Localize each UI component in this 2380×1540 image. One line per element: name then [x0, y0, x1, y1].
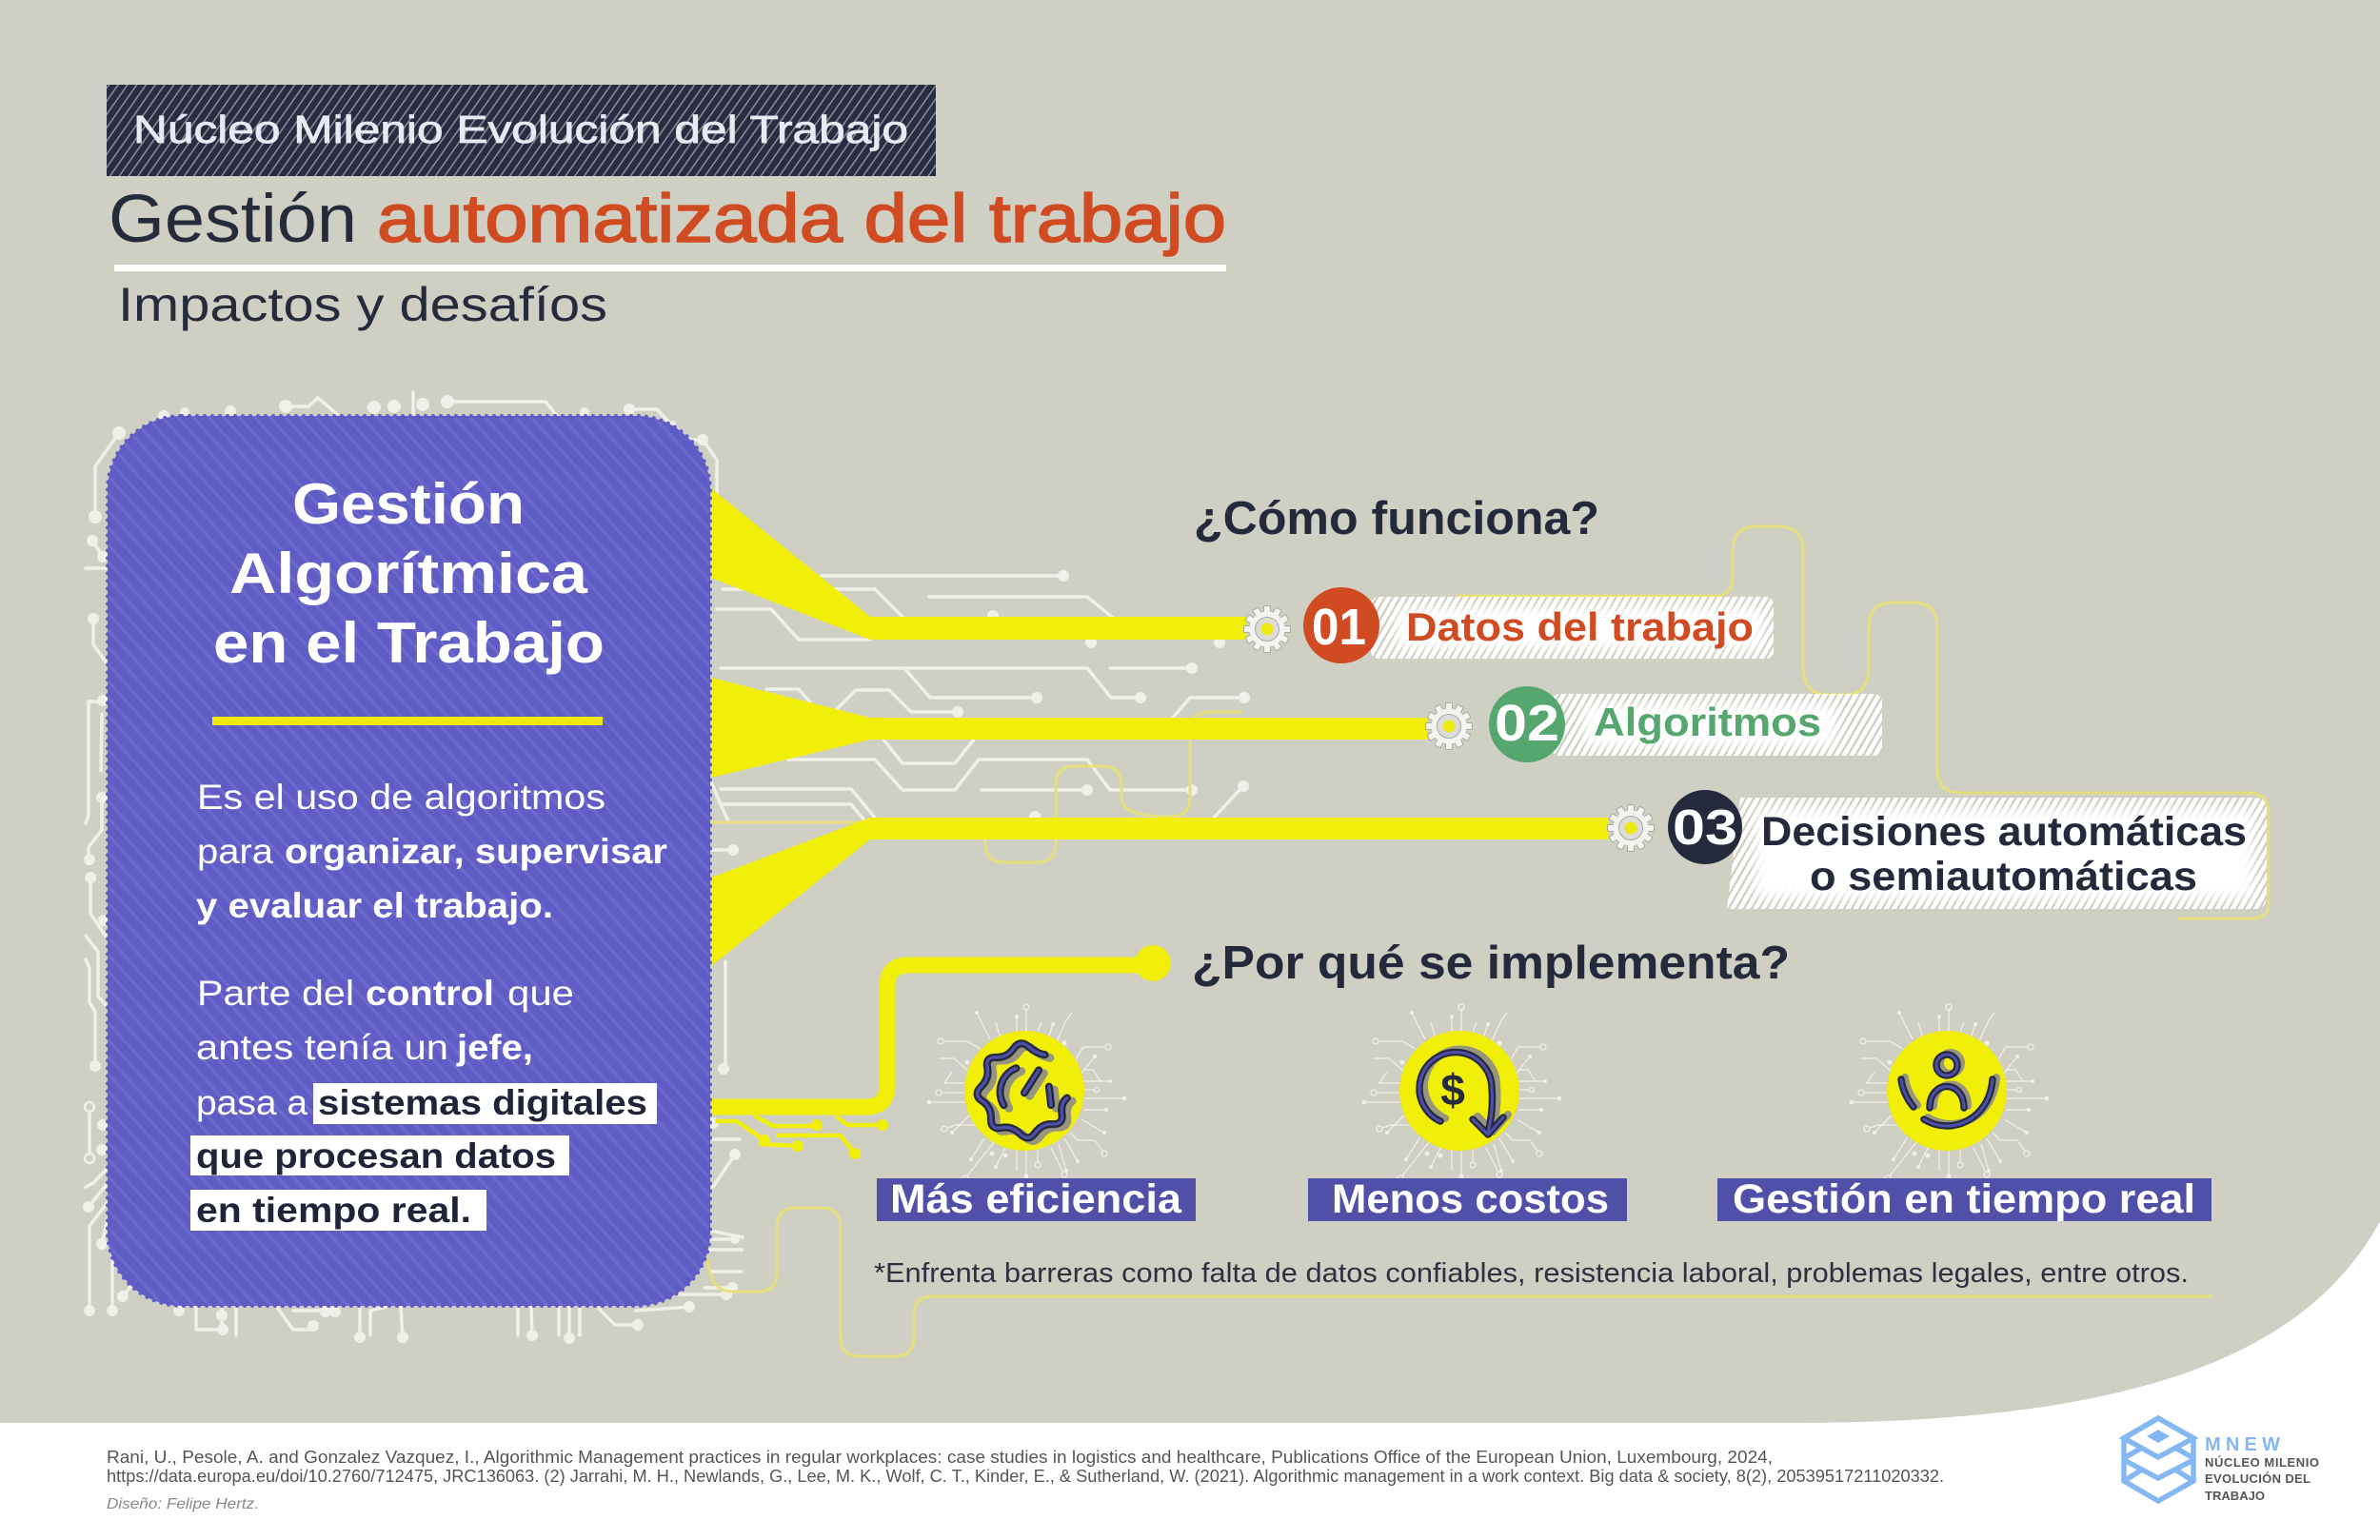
panel divider: [212, 717, 603, 725]
step 02 number: [1489, 686, 1565, 762]
panel definition text: antes tenía un: [196, 1028, 448, 1067]
connector 2: yellow taper to step 02: [711, 678, 1427, 778]
highlighted text: sistemas digitales: [318, 1083, 647, 1122]
panel definition text: y evaluar el trabajo.: [196, 886, 553, 925]
header band: [107, 85, 936, 176]
step 02 number: 02: [1495, 695, 1559, 752]
icon: layered hexagon: [2124, 1418, 2193, 1501]
panel heading: Algorítmica: [229, 542, 588, 605]
logo: EVOLUCIÓN DEL: [2205, 1471, 2311, 1486]
panel definition text: Parte del: [197, 974, 354, 1013]
logo: TRABAJO: [2205, 1489, 2265, 1503]
gear icon 2: [1426, 702, 1472, 750]
step 02 label band: Algoritmos: [1594, 700, 1821, 744]
header band: Núcleo Milenio Evolución del Trabajo: [133, 108, 908, 151]
step 01 number: 01: [1312, 599, 1366, 656]
heading: Cómo funciona: ¿Cómo funciona?: [1194, 493, 1599, 544]
step 03 label band: [1727, 798, 2267, 909]
panel heading: [213, 472, 605, 675]
panel definition text: pasa a: [196, 1083, 307, 1122]
heading: Por qué se implementa: ¿Por qué se implementa?: [1192, 938, 1790, 989]
panel definition text: control: [366, 974, 494, 1013]
panel: Gestión Algorítmica: [108, 416, 710, 1306]
title: [109, 182, 1226, 257]
gear icon 3: [1607, 805, 1655, 851]
references: https://data.europa.eu/doi/10.2760/712475, JRC136063. (2) Jarrahi, M. H., Newlands, G., Lee, M. K., Wolf, C. T., Kinder, E., & Sutherland, W. (2021). Algorithmic management in a work context. Big data & society, 8(2), 20539517211020332.: [107, 1467, 1944, 1486]
step 03 label band: Decisiones automáticas: [1761, 809, 2247, 855]
connector 3: yellow taper to step 03: [711, 818, 1609, 966]
logo: NÚCLEO MILENIO: [2205, 1455, 2319, 1470]
step 03 number: 03: [1673, 800, 1737, 856]
panel heading: Gestión: [292, 472, 525, 536]
gear icon 1: [1243, 605, 1291, 653]
panel definition text: para: [197, 832, 273, 871]
circuit traces around the panel: [83, 392, 1250, 1344]
title underline: [114, 265, 1226, 271]
step 01 number: [1303, 587, 1379, 663]
panel definition text: Es el uso de algoritmos: [197, 778, 605, 817]
icon: efficiency gear: [927, 1004, 1126, 1181]
icon: lower costs: [1362, 1004, 1561, 1181]
panel heading: en el Trabajo: [213, 611, 605, 675]
title: automatizada del trabajo: [377, 182, 1226, 257]
connector 4: yellow bus to why heading: [711, 945, 1171, 1159]
thin yellow trace: top right steps: [1458, 526, 2269, 918]
panel definition text: que: [507, 974, 574, 1013]
connector 1: yellow taper to step 01: [711, 488, 1247, 640]
highlighted text: [190, 1083, 657, 1231]
icon: real-time management: [1850, 1004, 2049, 1181]
highlighted text: que procesan datos: [196, 1136, 556, 1175]
title: Gestión: [109, 182, 357, 257]
highlighted text: en tiempo real.: [196, 1191, 471, 1230]
panel definition text: organizar, supervisar: [285, 832, 667, 871]
step 02 label band: [1552, 694, 1882, 756]
step 01 label band: [1371, 597, 1774, 659]
references: Rani, U., Pesole, A. and Gonzalez Vazquez, I., Algorithmic Management practices in regular workplaces: case studies in logistics and healthcare, Publications Office of the European Union, Luxembourg, 2024,: [107, 1448, 1773, 1467]
references: [107, 1448, 1944, 1486]
subtitle: Impactos y desafíos: [118, 278, 607, 331]
footnote: *Enfrenta barreras como falta de datos confiables, resistencia laboral, problemas legales, entre otros.: [874, 1258, 2189, 1289]
step 01 label band: Datos del trabajo: [1406, 604, 1754, 649]
panel definition text: [196, 778, 667, 1122]
panel definition text: jefe,: [456, 1028, 533, 1067]
icon: lower costs: $: [1440, 1065, 1465, 1115]
thin yellow trace: middle and bottom left: [707, 712, 2211, 1356]
step 03 label band: o semiautomáticas: [1810, 854, 2197, 899]
label: Gestión en tiempo real: Gestión en tiempo real: [1733, 1176, 2195, 1222]
step 03 number: [1668, 790, 1742, 864]
logo: [2124, 1418, 2319, 1503]
credit: Diseño: Felipe Hertz.: [107, 1496, 259, 1512]
logo: MNEW: [2205, 1434, 2280, 1455]
label: Menos costos: Menos costos: [1332, 1176, 1609, 1222]
label: Más eficiencia: Más eficiencia: [890, 1176, 1182, 1222]
